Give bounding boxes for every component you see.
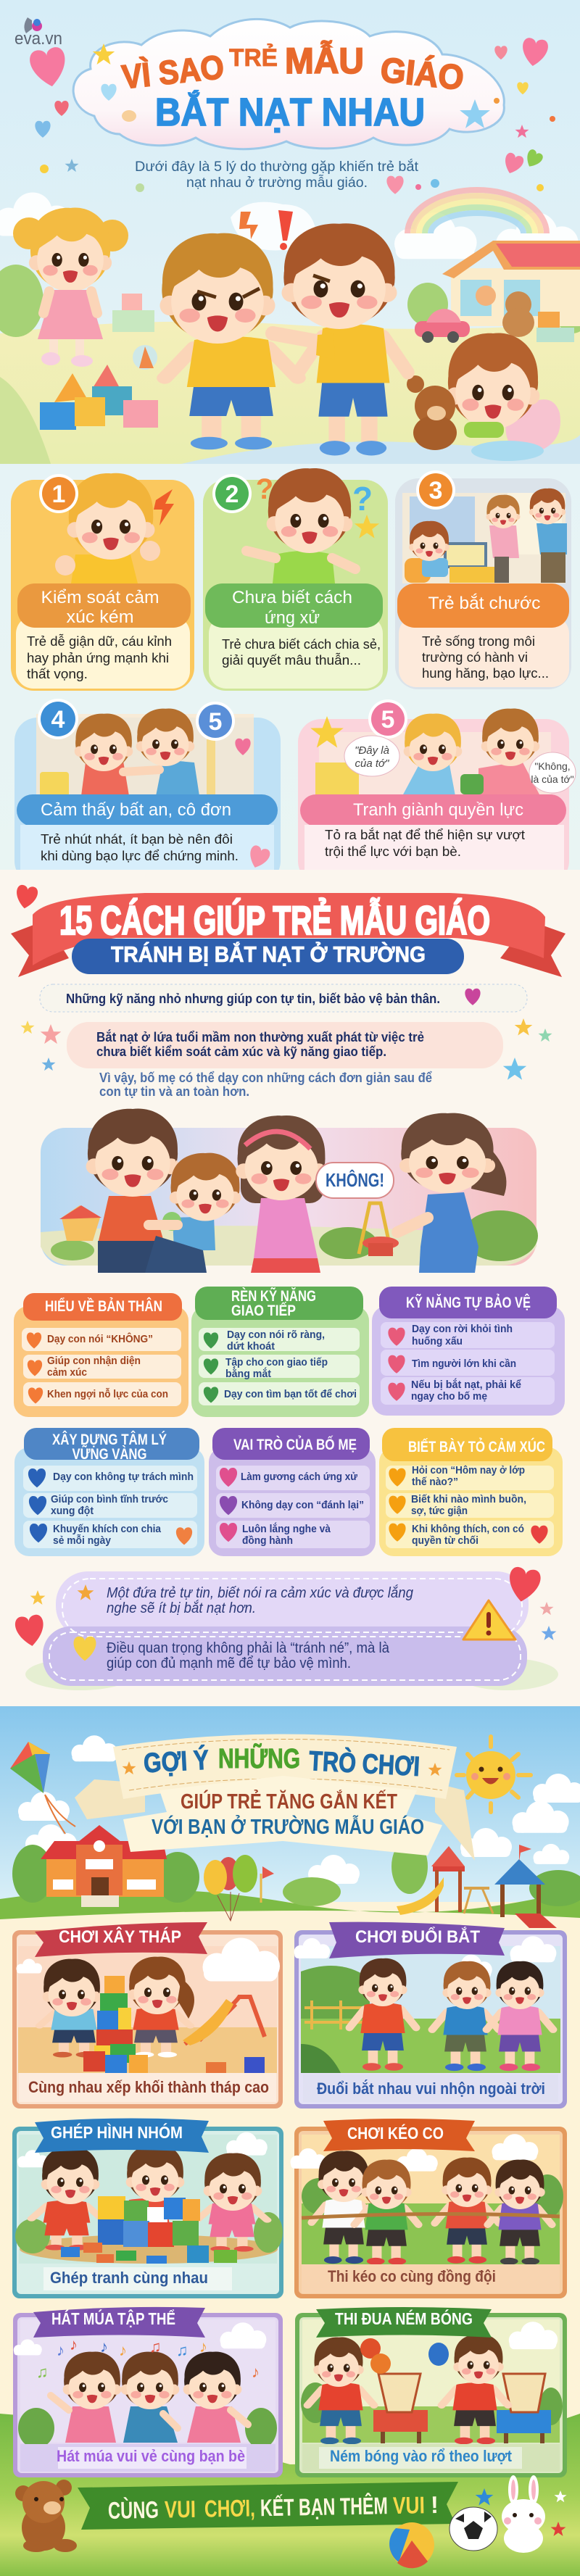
icon: sun (457, 1737, 531, 1812)
body text: trường có hành vi (422, 650, 528, 665)
list rows: Hỏi con “Hôm nay ở lớp (412, 1464, 525, 1476)
number badge 3: 3 (429, 477, 442, 504)
number badge 5 (196, 702, 235, 741)
title: second line: BẮT NẠT NHAU (155, 90, 425, 134)
header: BIẾT BÀY TỎ CẢM XÚC (408, 1438, 545, 1455)
header: RÈN KỸ NĂNG (231, 1288, 316, 1305)
icon: soccer ball (450, 2507, 497, 2551)
toy blocks (40, 294, 158, 430)
title: first line: VÌ SAO (120, 48, 225, 96)
speech bubble left: "Đây là (355, 744, 389, 757)
ground (0, 322, 580, 464)
illustration: singing and dancing (14, 2319, 277, 2448)
heading: Trẻ bắt chước (428, 594, 541, 613)
blue note (99, 1071, 432, 1099)
ribbon (35, 1922, 207, 1957)
list rows: Dạy con rời khỏi tình (412, 1323, 513, 1335)
ribbon (35, 2118, 209, 2153)
music notes (36, 2335, 260, 2381)
crying child (145, 1153, 241, 1273)
banner subtitle pill: TRÁNH BỊ BẮT NẠT Ở TRƯỜNG (111, 941, 426, 967)
title banner (75, 1734, 475, 1861)
illustration: two boys struggling (40, 708, 251, 797)
header (195, 1287, 363, 1320)
list rows: dứt khoát (227, 1340, 275, 1353)
header (382, 1428, 552, 1461)
panel: expressing emotions (379, 1428, 563, 1556)
number badge 4 (38, 699, 78, 739)
playground (397, 1845, 557, 1928)
list rows: Luôn lắng nghe và (242, 1522, 331, 1535)
bottom grass background (0, 2414, 580, 2576)
icon: balloons (204, 1855, 274, 1921)
body text: Trẻ sống trong môi (422, 634, 535, 649)
banner title (143, 1742, 420, 1782)
title: first line (120, 41, 465, 98)
banner (11, 884, 566, 977)
title: first line: GIÁO (378, 50, 465, 98)
closing banner: ! (431, 2491, 439, 2518)
mother (397, 1113, 506, 1273)
list rows: ngay cho bố mẹ (411, 1390, 487, 1403)
music notes: ♫ (36, 2363, 48, 2381)
list rows (216, 1466, 370, 1548)
list rows: huống xấu (412, 1335, 463, 1347)
illustration: child saying no (41, 1109, 538, 1273)
caption: Đuổi bắt nhau vui nhộn ngoài trời (317, 2080, 545, 2098)
list rows: quyền từ chối (412, 1534, 478, 1547)
logo: eva.vn: eva.vn (14, 29, 62, 49)
speech bubble KHÔNG: KHÔNG! (326, 1169, 384, 1191)
ribbon (316, 2307, 492, 2338)
banner title: GỢI Ý (143, 1744, 210, 1779)
intro text: Dưới đây là 5 lý do thường gặp khiến trẻ bắt (135, 159, 419, 175)
game card: ball toss (295, 2307, 567, 2477)
body text: trội thể lực với bạn bè. (325, 844, 461, 859)
music notes: ♪ (199, 2338, 207, 2356)
banner title: NHỮNG (218, 1742, 300, 1774)
title: first line: TRẺ (229, 44, 278, 72)
pink note: chưa biết kiểm soát cảm xúc và kỹ năng giao tiếp. (96, 1044, 386, 1059)
caption background (20, 2444, 276, 2472)
rainbow (407, 190, 547, 233)
background clouds (0, 193, 579, 293)
teddy bear and blocks on right (502, 291, 574, 342)
body text (41, 832, 239, 863)
caption: Thi kéo co cùng đồng đội (328, 2267, 496, 2285)
caption: Cùng nhau xếp khối thành tháp cao (28, 2078, 269, 2096)
caption: Ghép tranh cùng nhau (50, 2269, 208, 2287)
callout text top: nghe sẽ ít bị bắt nạt hơn. (107, 1600, 256, 1616)
caption background (19, 2073, 276, 2102)
heading: Cảm thấy bất an, cô đơn (41, 800, 231, 820)
section: why preschoolers bully (0, 0, 580, 884)
speech bubble right: là của tớ" (531, 773, 574, 785)
heading: Chưa biết cách (232, 588, 352, 607)
blue note: Vì vậy, bố mẹ có thể dạy con những cách đơn giản sau để (99, 1071, 432, 1085)
number badge 5: 5 (209, 708, 222, 736)
caption background (303, 2074, 558, 2102)
bully boy (86, 1109, 179, 1273)
illustration: hero scene of children arguing (0, 190, 580, 464)
speech bubble left (344, 736, 399, 776)
list rows: Khi không thích, con có (412, 1523, 524, 1535)
callout text bottom (107, 1640, 390, 1671)
crying child with teddy (407, 333, 560, 461)
list rows: Không dạy con “đánh lại” (241, 1499, 364, 1511)
illustration: two boys fighting over toy (315, 708, 540, 796)
list rows: đồng hành (242, 1534, 293, 1547)
header: KỸ NĂNG TỰ BẢO VỆ (406, 1294, 531, 1311)
illustration: angry blond boy (55, 473, 174, 583)
ribbon (33, 2307, 205, 2338)
list rows: bằng mắt (225, 1367, 271, 1380)
ribbon: THI ĐUA NÉM BÓNG (335, 2309, 473, 2328)
callout text top: Một đứa trẻ tự tin, biết nói ra cảm xúc và được lắng (107, 1584, 413, 1601)
closing banner: VUI (165, 2496, 196, 2523)
stars on banner (122, 1761, 442, 1776)
list rows: Giúp con bình tĩnh trước (51, 1493, 168, 1505)
icon: kite (10, 1742, 75, 1834)
intro pill (40, 984, 527, 1012)
number badge 2: 2 (225, 481, 239, 508)
game card: tower building (12, 1922, 283, 2108)
body text (222, 637, 381, 668)
intro text: nạt nhau ở trường mẫu giáo. (186, 175, 368, 191)
list rows: Tập cho con giao tiếp (225, 1356, 328, 1368)
number badge 2 (212, 474, 252, 513)
icon: pink heart (246, 844, 271, 871)
closing banner (78, 2482, 458, 2530)
section: 15 ways (0, 870, 580, 1706)
decorative hearts and stars (28, 37, 555, 194)
list rows: thế nào?” (412, 1476, 458, 1488)
speech bubble KHÔNG (316, 1163, 394, 1198)
panel: parents role (209, 1428, 376, 1556)
list rows: Nếu bị bắt nạt, phải kể (411, 1378, 521, 1391)
ribbon: CHƠI KÉO CO (347, 2123, 444, 2143)
icon: warning triangle (463, 1600, 515, 1640)
number badge 5 (368, 699, 407, 739)
music notes: ♪ (70, 2335, 78, 2353)
list rows: Biết khi nào mình buồn, (411, 1493, 526, 1505)
ribbon (329, 1922, 505, 1958)
list rows: xung đột (51, 1505, 94, 1517)
list rows (199, 1328, 360, 1405)
number badge 5: 5 (381, 706, 394, 734)
music notes: ♫ (176, 2341, 188, 2359)
blue note: con tự tin và an toàn hơn. (99, 1084, 249, 1099)
body text (27, 633, 172, 681)
list rows: Giúp con nhận diện (47, 1355, 141, 1367)
body text: Trẻ nhút nhát, ít bạn bè nên đôi (41, 832, 233, 847)
list rows: Khuyến khích con chia (53, 1523, 162, 1535)
list rows (22, 1328, 181, 1406)
panel: reason 1 (11, 473, 194, 691)
header: VAI TRÒ CỦA BỐ MẸ (233, 1436, 357, 1453)
house (442, 241, 580, 326)
header (212, 1428, 370, 1460)
heading: Kiểm soát cảm (41, 588, 160, 607)
list rows: sợ, tức giận (411, 1505, 468, 1517)
header band (17, 583, 191, 628)
caption background (19, 2264, 277, 2293)
ribbon: CHƠI XÂY THÁP (59, 1927, 181, 1947)
list rows (386, 1464, 554, 1548)
number badge 4: 4 (51, 706, 65, 734)
intro pill: Những kỹ năng nhỏ nhưng giúp con tự tin, biết bảo vệ bản thân. (66, 992, 440, 1006)
body text: hung hăng, bạo lực... (422, 666, 549, 681)
body text (325, 827, 525, 859)
illustration: kids doing puzzle (15, 2132, 283, 2264)
ribbon: CHƠI ĐUỔI BẮT (355, 1927, 480, 1947)
header band (300, 794, 566, 826)
list rows: Dạy con nói “KHÔNG” (47, 1332, 153, 1345)
closing banner: VUI (393, 2491, 425, 2519)
school building (41, 1825, 167, 1907)
illustration: kids stacking blocks (16, 1938, 280, 2077)
decorative stars (20, 1018, 552, 1080)
banner subtitle ribbon: GIÚP TRẺ TĂNG GẮN KẾT (181, 1789, 397, 1813)
icon: beach ball (389, 2522, 434, 2568)
clouds (18, 1735, 580, 1884)
list rows: Khen ngợi nỗ lực của con (47, 1388, 168, 1400)
speech bubble right (529, 752, 576, 793)
callout: key messages (14, 1566, 558, 1690)
header: XÂY DỰNG TÂM LÝ (52, 1431, 167, 1448)
girl watching (13, 208, 128, 367)
game card: singing (13, 2307, 283, 2477)
section: games (0, 1706, 580, 2576)
body text: Trẻ chưa biết cách chia sẻ, (222, 637, 381, 652)
intro text (135, 159, 419, 191)
list rows: sẻ mỗi ngày (53, 1534, 112, 1547)
number badge 1: 1 (52, 481, 65, 508)
banner subtitle pill (72, 939, 464, 974)
list rows: Dạy con tìm bạn tốt để chơi (224, 1388, 357, 1400)
illustration: throwing balls in baskets (301, 2319, 563, 2444)
list rows (381, 1322, 555, 1405)
banner title: TRÒ CHƠI (308, 1745, 420, 1782)
heading: xúc kém (67, 607, 133, 627)
header band (397, 583, 569, 628)
music notes: ♪ (100, 2338, 108, 2356)
illustration: kids running (294, 1936, 560, 2073)
callout text bottom: Điều quan trọng không phải là “tránh né”, mà là (107, 1640, 390, 1656)
speech bubble right: "Không, (534, 760, 571, 772)
header (23, 1293, 182, 1321)
icon: bunny (502, 2475, 545, 2553)
heading: ứng xử (265, 608, 320, 628)
icon: orange sparkle (78, 1584, 94, 1600)
list rows: Dạy con nói rõ ràng, (227, 1329, 325, 1341)
text background (304, 825, 564, 876)
panel: reason 4 (14, 699, 281, 884)
header band (205, 583, 383, 628)
speech bubble left: của tớ" (355, 757, 389, 770)
girl (236, 1115, 327, 1273)
panel: self-protection skills (372, 1287, 565, 1416)
illustration: confused boy: ? (256, 473, 273, 505)
bushes and playground (51, 1203, 538, 1261)
icons: small stars (476, 2488, 567, 2536)
illustration: confused boy (246, 468, 379, 583)
music notes: ♪ (252, 2363, 260, 2381)
caption background (302, 2444, 560, 2472)
sky (0, 1706, 580, 1902)
closing banner: CHƠI, (204, 2494, 255, 2522)
number badge 3 (416, 470, 455, 510)
logo: eva.vn (14, 17, 62, 49)
boy in yellow shirt, fists clenched (160, 233, 298, 449)
closing banner: CÙNG (108, 2496, 159, 2524)
list rows: Tìm người lớn khi cần (412, 1358, 516, 1370)
body text (422, 634, 549, 681)
music notes: ♪ (119, 2341, 127, 2359)
caption: Ném bóng vào rổ theo lượt (330, 2447, 513, 2465)
list rows: cảm xúc (47, 1366, 87, 1379)
game card: chasing (294, 1922, 567, 2108)
panel: strong psychology (14, 1428, 204, 1556)
boy pointing finger (273, 223, 408, 455)
pink note: Bắt nạt ở lứa tuổi mầm non thường xuất phát từ việc trẻ (96, 1029, 424, 1044)
list rows (23, 1466, 197, 1548)
ribbon (323, 2119, 475, 2151)
ribbon: GHÉP HÌNH NHÓM (51, 2122, 183, 2142)
callout text bottom: giúp con đủ mạnh mẽ để tự bảo vệ mình. (107, 1655, 351, 1671)
callout text top (107, 1584, 413, 1616)
speech bubble with warning marks (231, 202, 316, 251)
hills and trees (0, 1839, 580, 1919)
illustration: child watching violent tv and adults (402, 489, 567, 583)
header: VỮNG VÀNG (72, 1445, 146, 1463)
pink note (67, 1022, 503, 1068)
icon: yellow heart (74, 1637, 96, 1661)
icon: red hearts (14, 1566, 542, 1648)
caption background (302, 2264, 560, 2293)
panel: reason 5 (298, 699, 576, 884)
illustration: confused boy: ? (352, 480, 373, 518)
closing banner: KẾT BẠN THÊM (260, 2492, 388, 2521)
body text: hay phản ứng mạnh khi (27, 651, 169, 665)
body text: giải quyết mâu thuẫn... (222, 652, 361, 668)
header (379, 1287, 557, 1318)
heading (232, 588, 352, 628)
number badge 1 (39, 474, 78, 513)
title: first line: MẪU (285, 41, 364, 81)
heading (41, 588, 160, 627)
panel: communication skills (191, 1287, 369, 1417)
header (24, 1428, 199, 1463)
title cloud (73, 19, 504, 149)
body text: Trẻ dễ giận dữ, cáu kỉnh (27, 633, 172, 649)
game card: tug of war (290, 2119, 567, 2298)
banner subtitle ribbon (123, 1776, 442, 1856)
banner subtitle ribbon: VỚI BẠN Ở TRƯỜNG MẪU GIÁO (152, 1814, 424, 1839)
icon: teddy bear (15, 2480, 77, 2552)
list rows: Dạy con không tự trách mình (53, 1471, 194, 1483)
panel: reason 3 (395, 470, 571, 689)
panel: understanding self (14, 1293, 188, 1417)
heading: Tranh giành quyền lực (353, 800, 523, 820)
body text: khi dùng bạo lực để chứng minh. (41, 849, 239, 863)
header: GIAO TIẾP (231, 1302, 296, 1319)
header band (17, 794, 278, 826)
toy car (415, 309, 470, 343)
ribbon: HÁT MÚA TẬP THỂ (51, 2309, 175, 2328)
list rows: Làm gương cách ứng xử (241, 1471, 357, 1483)
music notes: ♫ (149, 2338, 161, 2356)
text background (20, 825, 274, 876)
bushes (0, 261, 580, 337)
illustration: tug of war (290, 2134, 563, 2265)
body text: thất vọng. (27, 667, 88, 681)
game card: puzzle (12, 2118, 283, 2298)
music notes: ♪ (57, 2341, 65, 2359)
panel: reason 2 (203, 468, 388, 691)
icon: star (310, 716, 344, 747)
header: HIỂU VỀ BẢN THÂN (45, 1297, 162, 1315)
caption: Hát múa vui vẻ cùng bạn bè (57, 2447, 245, 2465)
body text: Tỏ ra bắt nạt để thể hiện sự vượt (325, 827, 525, 842)
